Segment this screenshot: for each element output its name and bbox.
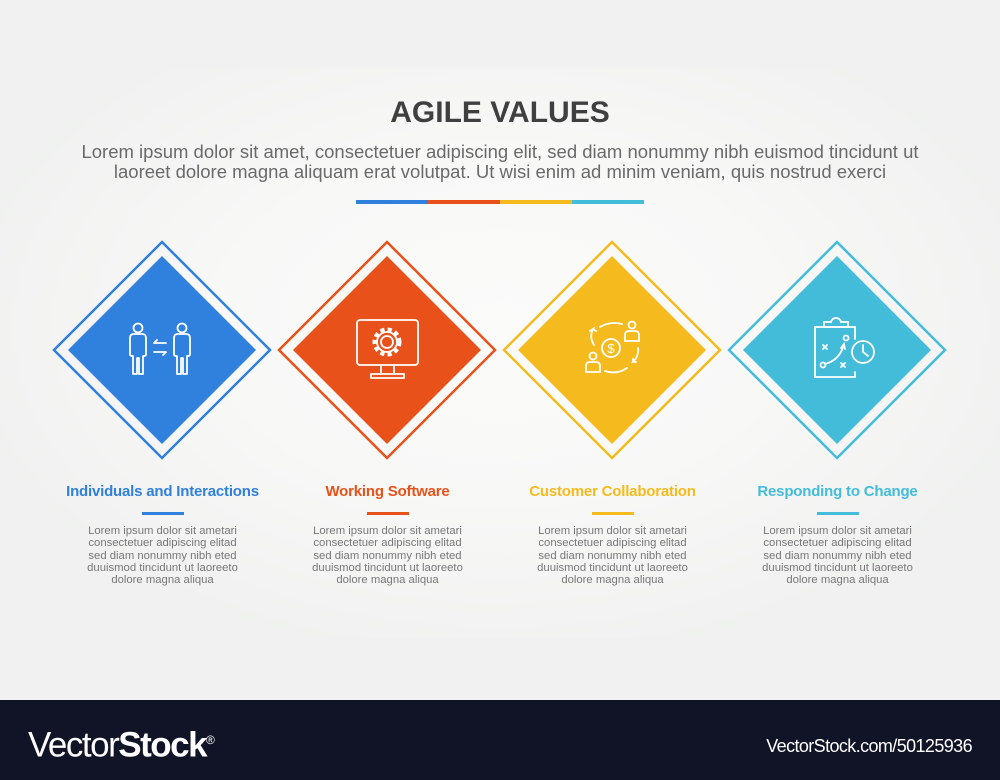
column: individuals and interactions: Lorem ipsum dolor sit ametari [88,525,237,537]
diamond: working software [279,242,495,458]
column: responding to change: duuismod tincidunt ut laoreeto [762,562,913,574]
column: working software: Working Software [325,483,450,500]
column: responding to change: sed diam nonummy nibh eted [763,550,912,562]
icon: monitor with gear [357,320,418,378]
column: customer collaboration: Customer Collaboration [529,483,696,500]
diamond: individuals and interactions [54,242,270,458]
column: responding to change: Lorem ipsum dolor sit ametari [763,525,912,537]
column: customer collaboration: duuismod tincidunt ut laoreeto [537,562,688,574]
subtitle text [81,141,919,182]
column: customer collaboration: sed diam nonummy nibh eted [538,550,687,562]
column: individuals and interactions: duuismod tincidunt ut laoreeto [87,562,238,574]
column: customer collaboration [529,483,696,586]
footer url: VectorStock.com/50125936 [766,736,972,756]
column: working software: consectetuer adipiscing elitad [313,537,462,549]
column: individuals and interactions: sed diam nonummy nibh eted [88,550,237,562]
column: customer collaboration: consectetuer adipiscing elitad [538,537,687,549]
diamond: responding to change [729,242,945,458]
column: working software: sed diam nonummy nibh eted [313,550,462,562]
color divider bar [356,200,644,204]
footer band [0,700,1000,780]
column: responding to change: dolore magna aliqua [786,574,889,586]
title: AGILE VALUES [390,96,610,129]
column: customer collaboration: dolore magna aliqua [561,574,664,586]
column: working software: Lorem ipsum dolor sit ametari [313,525,462,537]
diamond: customer collaboration [504,242,720,458]
column: individuals and interactions: dolore magna aliqua [111,574,214,586]
subtitle text: Lorem ipsum dolor sit amet, consectetuer adipiscing elit, sed diam nonummy nibh euismod tincidunt ut [81,141,919,162]
column: working software: dolore magna aliqua [336,574,439,586]
icon: people and money cycle: $ [607,341,615,356]
column: working software: duuismod tincidunt ut laoreeto [312,562,463,574]
column: individuals and interactions: Individuals and Interactions [66,483,259,500]
icon: two people exchanging [130,324,190,374]
icon: people and money cycle [586,322,639,372]
column: individuals and interactions [66,483,259,586]
subtitle text: laoreet dolore magna aliquam erat volutpat. Ut wisi enim ad minim veniam, quis nostrud exerci [114,161,886,182]
column: individuals and interactions: consectetuer adipiscing elitad [88,537,237,549]
footer logo: VectorStock® [28,726,213,765]
icon: clipboard plan with clock [815,318,874,377]
column: responding to change [757,483,918,586]
column: responding to change: Responding to Change [757,483,918,500]
column: responding to change: consectetuer adipiscing elitad [763,537,912,549]
column: working software [312,483,463,586]
column: customer collaboration: Lorem ipsum dolor sit ametari [538,525,687,537]
